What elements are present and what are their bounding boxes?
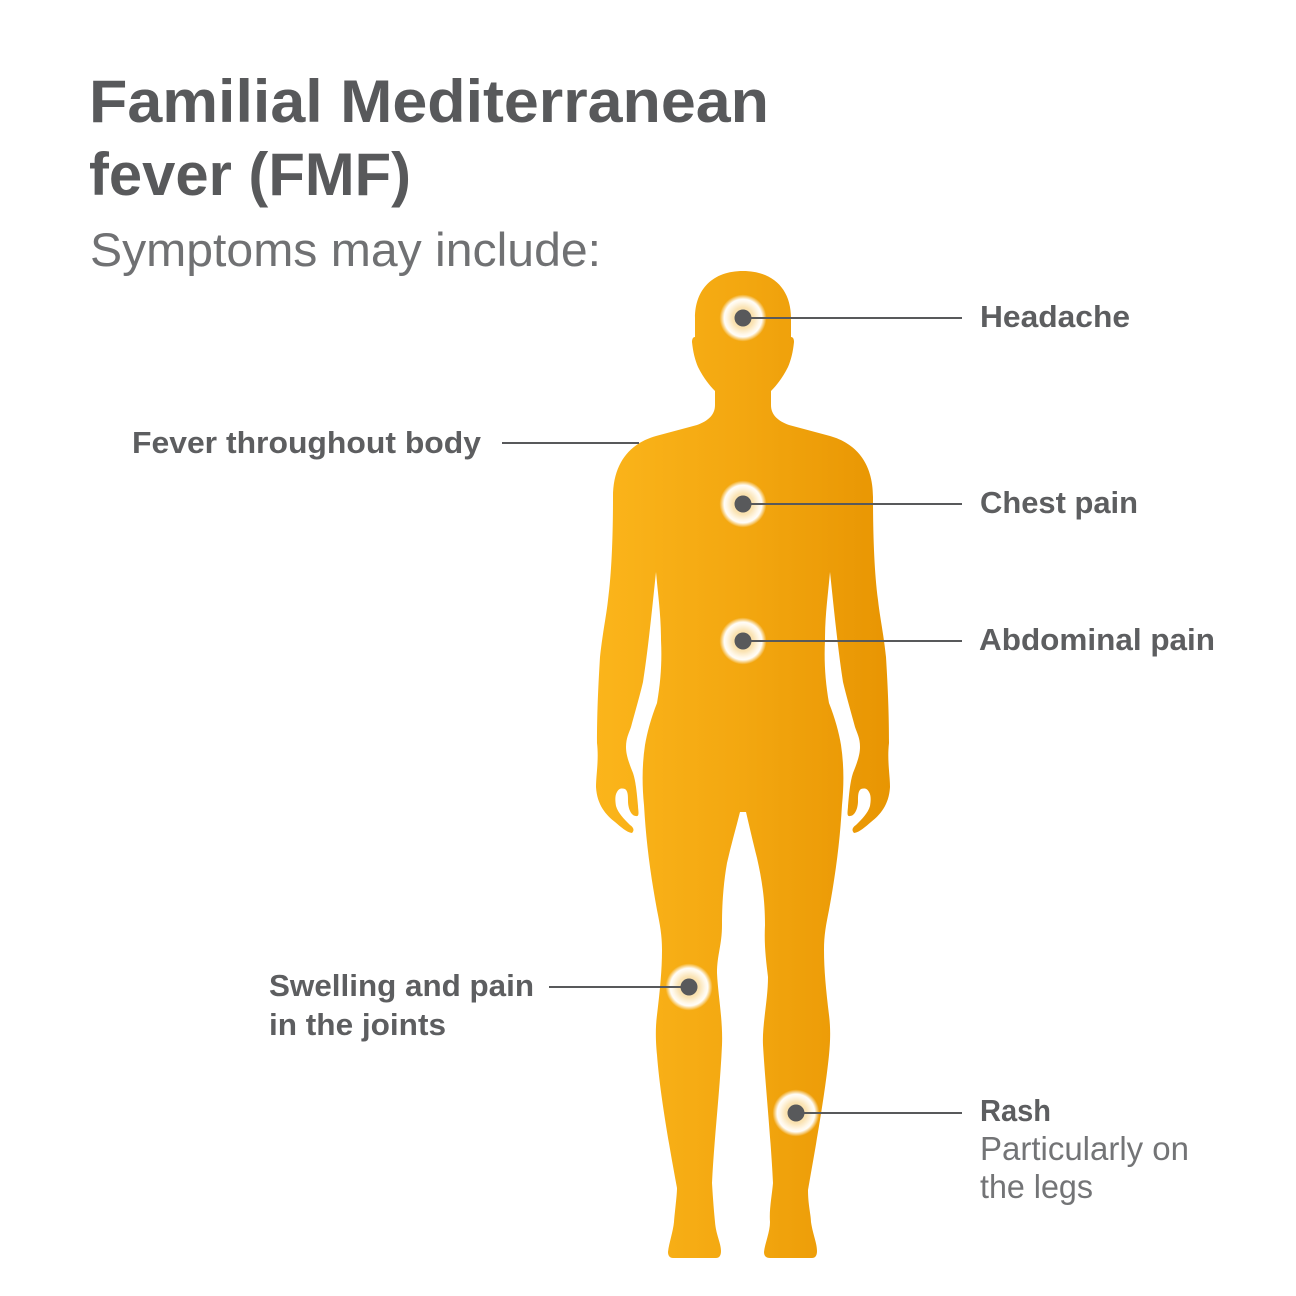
label: rash: the legs <box>980 1168 1093 1205</box>
subtitle: Symptoms may include: <box>90 223 601 276</box>
marker: joints <box>549 964 712 1010</box>
title <box>89 68 769 208</box>
label: chest pain: Chest pain <box>980 485 1138 520</box>
label: joints <box>269 968 534 1042</box>
marker: abdomen <box>720 618 962 664</box>
label: headache: Headache <box>980 299 1130 334</box>
title: fever (FMF) <box>89 141 411 208</box>
label: fever: Fever throughout body <box>132 425 482 460</box>
label: joints: Swelling and pain <box>269 968 534 1003</box>
label: rash: Rash <box>980 1093 1051 1128</box>
label: abdominal pain: Abdominal pain <box>979 622 1215 657</box>
label: rash <box>980 1093 1189 1205</box>
label: joints: in the joints <box>269 1007 446 1042</box>
marker: chest <box>720 480 962 528</box>
body silhouette <box>596 271 890 1258</box>
marker: rash <box>772 1090 962 1136</box>
leader line: fever <box>502 442 639 444</box>
title: Familial Mediterranean <box>89 68 769 135</box>
label: rash: Particularly on <box>980 1130 1189 1167</box>
marker: headache <box>720 294 962 342</box>
